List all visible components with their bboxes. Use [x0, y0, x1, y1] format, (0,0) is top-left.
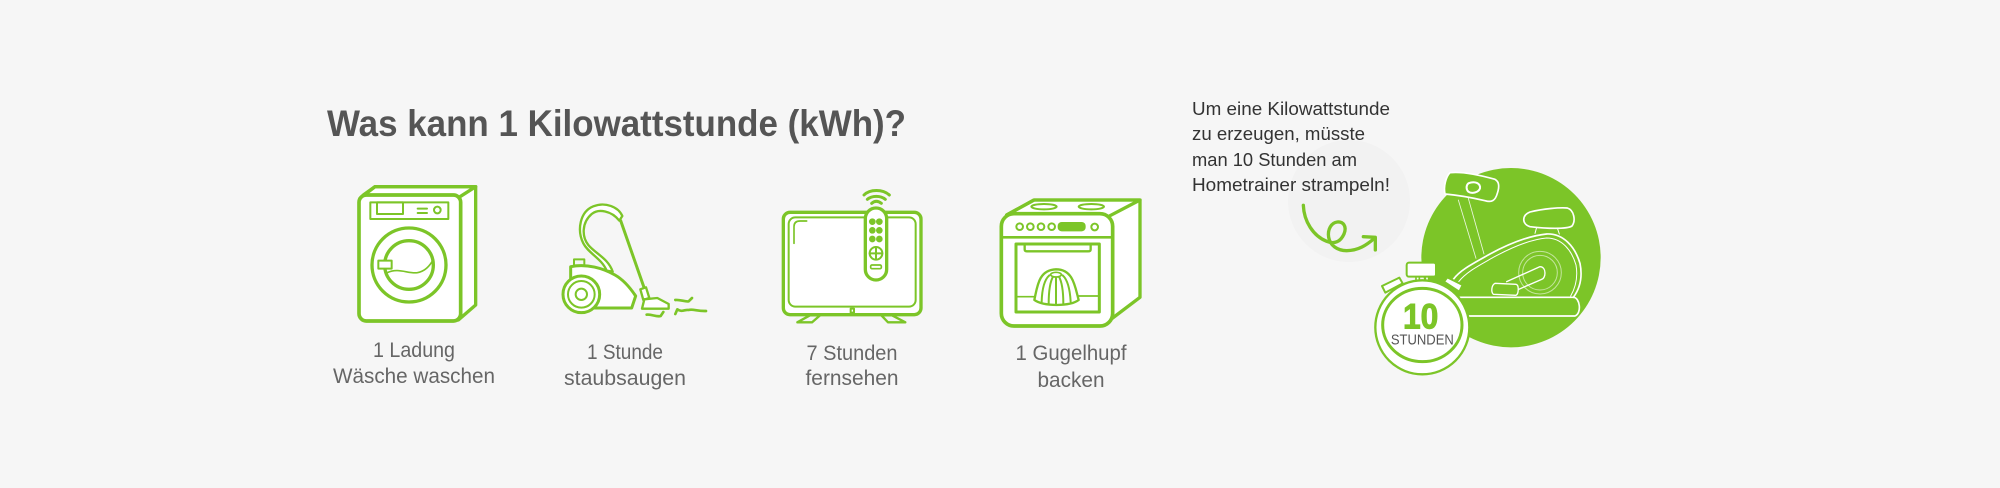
label: vacuuming: staubsaugen — [564, 367, 686, 390]
text: note on home trainer: Hometrainer strampeln! — [1192, 175, 1390, 195]
icon: washing machine — [359, 187, 476, 321]
label: washing: 1 Ladung — [373, 339, 455, 362]
label: vacuuming: 1 Stunde — [587, 341, 663, 364]
label: television: 7 Stunden — [806, 342, 898, 365]
label: television — [806, 342, 898, 390]
label: STUNDEN: STUNDEN — [1391, 332, 1454, 348]
text: note on home trainer: Um eine Kilowattstunde — [1192, 99, 1390, 119]
icon: television with remote — [783, 190, 921, 322]
text: note on home trainer: zu erzeugen, müsste — [1192, 124, 1365, 144]
label: oven — [1016, 342, 1127, 392]
grey circle behind note — [1288, 140, 1410, 262]
label: oven: backen — [1038, 369, 1104, 392]
icon: vacuum cleaner — [563, 205, 706, 316]
icon: oven with cake — [1001, 200, 1140, 326]
icon: stopwatch with 10 hours — [1375, 263, 1469, 374]
label: washing: Wäsche waschen — [333, 365, 495, 388]
icon: exercise bike on green circle — [1421, 168, 1601, 347]
number: 10: 10 — [1403, 297, 1438, 336]
arrow: curly — [1303, 205, 1375, 251]
label: washing — [333, 339, 495, 388]
title: Was kann 1 Kilowattstunde (kWh)? — [327, 103, 906, 144]
text: note on home trainer: man 10 Stunden am — [1192, 150, 1357, 170]
label: oven: 1 Gugelhupf — [1016, 342, 1127, 365]
text: note on home trainer — [1192, 99, 1390, 195]
label: television: fernsehen — [806, 367, 898, 390]
label: vacuuming — [564, 341, 686, 390]
